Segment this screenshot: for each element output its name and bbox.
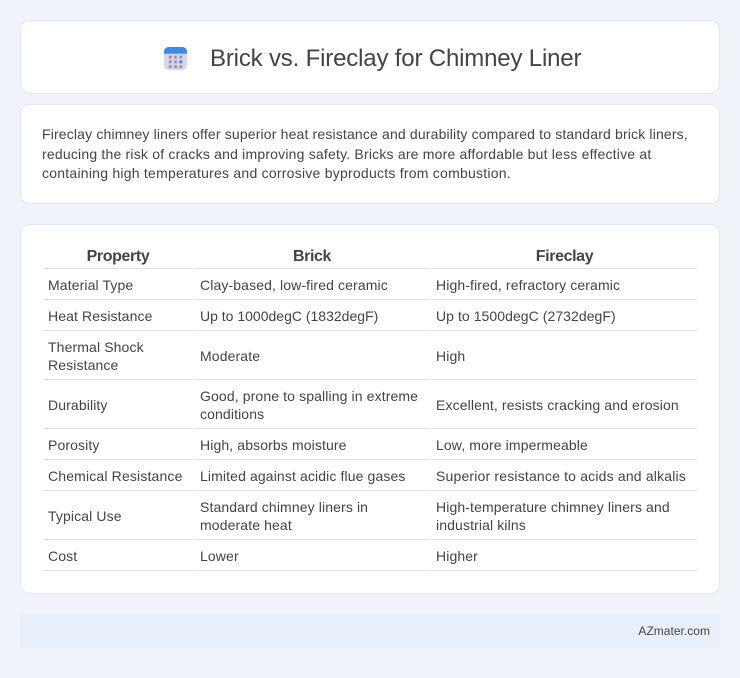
row: cost: Higher	[436, 548, 478, 564]
row: durability: Excellent, resists cracking and erosion	[436, 397, 679, 413]
row: typical use: High-temperature chimney liners and	[436, 499, 670, 515]
row: durability: conditions	[200, 406, 264, 422]
intro paragraph: Fireclay chimney liners offer superior heat resistance and durability compared to standard brick liners,	[42, 126, 688, 142]
title card	[20, 20, 720, 94]
row: durability: Good, prone to spalling in extreme	[200, 388, 418, 404]
intro paragraph: reducing the risk of cracks and improving safety. Bricks are more affordable but less effective at	[42, 146, 651, 162]
row: thermal shock resistance: Resistance	[48, 357, 118, 373]
row: typical use: moderate heat	[200, 517, 292, 533]
row: heat resistance: Heat Resistance	[48, 308, 153, 324]
table header: Fireclay	[536, 248, 593, 265]
row: thermal shock resistance	[48, 339, 465, 373]
row: heat resistance	[48, 308, 616, 324]
row: porosity: Porosity	[48, 437, 100, 453]
table header	[87, 248, 594, 265]
row: material type: Clay-based, low-fired ceramic	[200, 277, 388, 293]
intro paragraph	[42, 126, 688, 181]
row: cost	[48, 548, 478, 564]
icon: calendar	[164, 47, 188, 70]
row: material type: Material Type	[48, 277, 133, 293]
row: material type: High-fired, refractory ceramic	[436, 277, 620, 293]
footer bar	[20, 614, 720, 648]
comparison table panel	[20, 224, 720, 594]
row: thermal shock resistance: Moderate	[200, 348, 260, 364]
row: heat resistance: Up to 1500degC (2732degF)	[436, 308, 616, 324]
intro text panel	[20, 104, 720, 204]
row: typical use: Typical Use	[48, 508, 122, 524]
row: cost: Lower	[200, 548, 239, 564]
comparison table	[43, 248, 697, 571]
row: material type	[48, 277, 620, 293]
row: porosity: Low, more impermeable	[436, 437, 588, 453]
row: chemical resistance: Superior resistance to acids and alkalis	[436, 468, 686, 484]
row: typical use: Standard chimney liners in	[200, 499, 368, 515]
row: thermal shock resistance: High	[436, 348, 465, 364]
row: porosity: High, absorbs moisture	[200, 437, 347, 453]
row: chemical resistance: Limited against acidic flue gases	[200, 468, 406, 484]
row: typical use: industrial kilns	[436, 517, 526, 533]
row: heat resistance: Up to 1000degC (1832degF)	[200, 308, 378, 324]
table header: Property	[87, 248, 149, 265]
row: chemical resistance: Chemical Resistance	[48, 468, 183, 484]
row: durability: Durability	[48, 397, 108, 413]
row: durability	[48, 388, 679, 422]
row: typical use	[48, 499, 670, 533]
row: porosity	[48, 437, 588, 453]
row: cost: Cost	[48, 548, 77, 564]
table header: Brick	[293, 248, 331, 265]
row: chemical resistance	[48, 468, 686, 484]
intro paragraph: containing high temperatures and corrosive byproducts from combustion.	[42, 165, 511, 181]
title: Brick vs. Fireclay for Chimney Liner	[210, 45, 581, 72]
footer credit: AZmater.com	[638, 624, 710, 638]
row: thermal shock resistance: Thermal Shock	[48, 339, 144, 355]
row dividers	[43, 268, 697, 571]
